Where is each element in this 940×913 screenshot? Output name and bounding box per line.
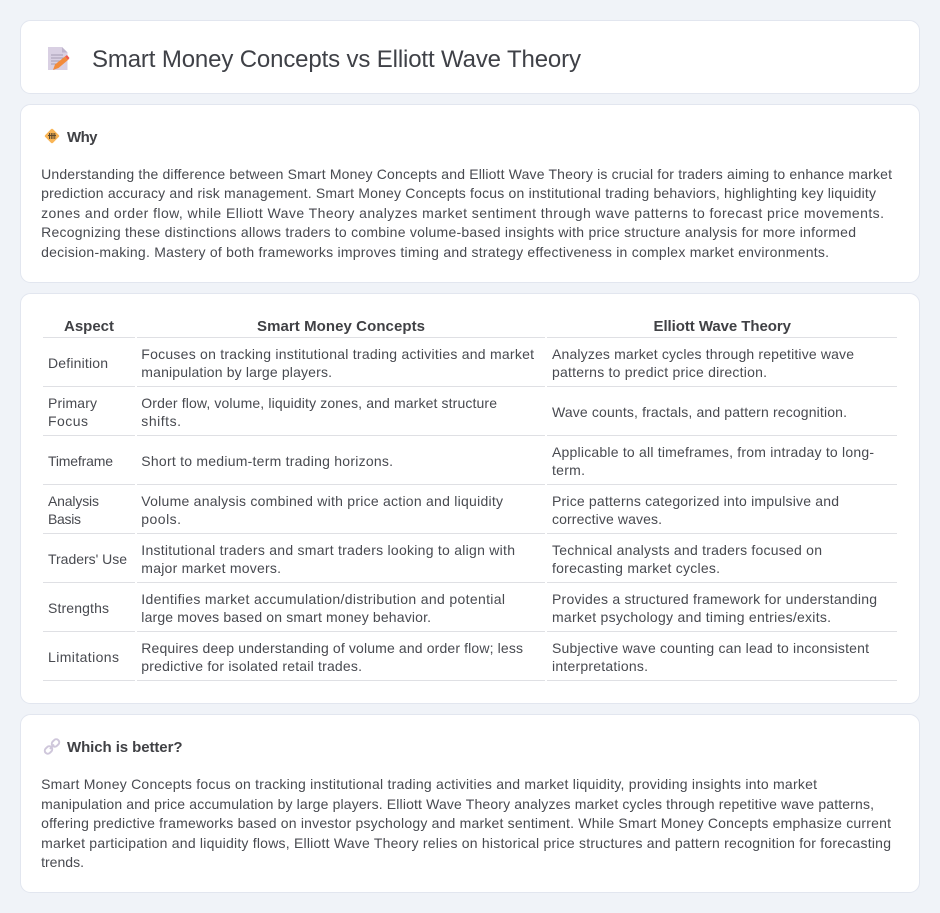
row: primary focus: Focus — [48, 413, 88, 429]
row: definition: Definition — [48, 355, 108, 371]
table header: Aspect — [64, 318, 114, 335]
text block: which is better paragraph: trends. — [41, 854, 84, 870]
icon: diamond sign — [44, 128, 60, 144]
row: traders' use: Institutional traders and smart traders looking to align with — [141, 542, 515, 558]
heading: why: Why — [67, 129, 98, 146]
row: analysis basis: Basis — [48, 511, 81, 527]
text block: why paragraph: Understanding the difference between Smart Money Concepts and Elliott Wave Theory is crucial for traders aiming to enhance market — [41, 166, 892, 182]
table header: Smart Money Concepts — [257, 318, 425, 335]
row: strengths: large moves based on smart money behavior. — [141, 609, 431, 625]
row: limitations: interpretations. — [552, 658, 648, 674]
row: traders' use: Traders' Use — [48, 551, 127, 567]
text block: which is better paragraph: Smart Money Concepts focus on tracking institutional trading activities and market liquidity, providing insights into market — [41, 776, 817, 792]
row: definition — [48, 346, 854, 380]
row: traders' use: major market movers. — [141, 560, 281, 576]
row: traders' use — [48, 542, 822, 576]
text block: which is better paragraph — [41, 776, 891, 870]
row: timeframe: Short to medium-term trading horizons. — [141, 453, 393, 469]
row: timeframe: Applicable to all timeframes, from intraday to long- — [552, 444, 874, 460]
row: primary focus: Wave counts, fractals, and pattern recognition. — [552, 404, 847, 420]
text block: which is better paragraph: offering predictive frameworks based on investor psychology and market sentiment. While Smart Money Concepts emphasize current — [41, 815, 891, 831]
row: limitations — [48, 640, 869, 674]
row: strengths: Strengths — [48, 600, 109, 616]
table header: Elliott Wave Theory — [654, 318, 792, 335]
row: limitations: Limitations — [48, 649, 119, 665]
row: analysis basis: Analysis — [48, 493, 99, 509]
panel: comparison table — [20, 294, 920, 704]
text block: which is better paragraph: market participation and liquidity flows, Elliott Wave Theory relies on historical price structures and pattern recognition for forecasting — [41, 835, 891, 851]
row: timeframe — [48, 444, 874, 478]
row: strengths: Identifies market accumulation/distribution and potential — [141, 591, 505, 607]
row: limitations: predictive for isolated retail trades. — [141, 658, 362, 674]
text block: why paragraph: decision-making. Mastery of both frameworks improves timing and strategy effectiveness in complex market environments. — [41, 244, 829, 260]
panel: title card — [20, 20, 920, 94]
row: traders' use: Technical analysts and traders focused on — [552, 542, 822, 558]
row: traders' use: forecasting market cycles. — [552, 560, 720, 576]
row: primary focus: Order flow, volume, liquidity zones, and market structure — [141, 395, 497, 411]
panel: why — [20, 104, 920, 282]
row: primary focus: Primary — [48, 395, 97, 411]
row: definition: patterns to predict price direction. — [552, 364, 767, 380]
row: analysis basis: Volume analysis combined with price action and liquidity — [141, 493, 503, 509]
row: analysis basis: Price patterns categorized into impulsive and — [552, 493, 839, 509]
row: definition: Focuses on tracking institutional trading activities and market — [141, 346, 534, 362]
text block: why paragraph: prediction accuracy and risk management. Smart Money Concepts focus on institutional trading behaviors, highlighting key liquidity — [41, 185, 876, 201]
row: limitations: Subjective wave counting can lead to inconsistent — [552, 640, 869, 656]
row: definition: manipulation by large players. — [141, 364, 332, 380]
row: timeframe: Timeframe — [48, 453, 113, 469]
row: strengths: market psychology and timing entries/exits. — [552, 609, 831, 625]
row: strengths — [48, 591, 877, 625]
row: primary focus — [48, 395, 847, 429]
text block: why paragraph: zones and order flow, while Elliott Wave Theory analyzes market sentiment through wave patterns to forecast price movements. — [41, 205, 884, 221]
row: primary focus: shifts. — [141, 413, 181, 429]
icon: chain link — [44, 738, 60, 755]
row: limitations: Requires deep understanding of volume and order flow; less — [141, 640, 523, 656]
icon: document with pencil — [48, 47, 70, 70]
text block: why paragraph — [41, 166, 892, 260]
text block: which is better paragraph: manipulation and price accumulation by large players. Elliott Wave Theory analyzes market cycles through repetitive wave patterns, — [41, 796, 874, 812]
row: analysis basis — [48, 493, 839, 527]
row: strengths: Provides a structured framework for understanding — [552, 591, 877, 607]
panel: which is better — [20, 714, 920, 892]
table header — [64, 318, 792, 335]
row: definition: Analyzes market cycles through repetitive wave — [552, 346, 854, 362]
row: analysis basis: corrective waves. — [552, 511, 662, 527]
heading: which is better: Which is better? — [67, 739, 182, 756]
text block: why paragraph: Recognizing these distinctions allows traders to combine volume-based insights with price structure analysis for more informed — [41, 224, 856, 240]
row: analysis basis: pools. — [141, 511, 181, 527]
row: timeframe: term. — [552, 462, 585, 478]
title: Smart Money Concepts vs Elliott Wave Theory — [92, 46, 581, 73]
